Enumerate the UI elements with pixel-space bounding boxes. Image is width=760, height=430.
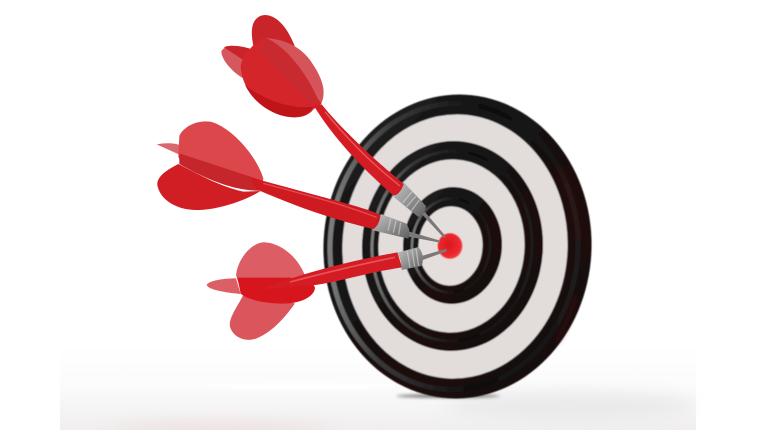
needle <box>422 249 447 260</box>
barrel <box>393 183 426 217</box>
target board <box>316 88 599 405</box>
dart 1: top <box>221 15 446 238</box>
floor shadow <box>60 345 696 430</box>
dart 3: bottom <box>207 242 447 340</box>
centre white disc <box>416 204 485 288</box>
needle <box>408 231 440 243</box>
barrel <box>397 247 423 270</box>
middle black ring <box>357 136 548 356</box>
lower flight <box>230 295 295 340</box>
rear small flight <box>207 278 241 294</box>
rear top flight <box>252 15 295 48</box>
front flight <box>237 278 315 304</box>
rim bevel <box>323 97 585 396</box>
red bullseye <box>438 233 462 259</box>
central vane <box>179 153 263 190</box>
darts, drawn in 3x zoom coordinates <box>157 15 447 340</box>
lower flight <box>157 164 261 210</box>
needle <box>422 212 446 238</box>
rear left flight <box>221 46 253 79</box>
upper flight <box>178 121 263 191</box>
rear small flight <box>157 143 180 155</box>
outer white ring <box>335 108 575 385</box>
shaft <box>250 177 381 229</box>
front flight <box>241 37 322 117</box>
inner black ring <box>400 184 505 307</box>
upper flight <box>236 242 307 293</box>
right translucent flight <box>265 38 324 106</box>
dart 2: middle <box>157 121 440 243</box>
inner white ring <box>374 155 529 337</box>
dark red reflections on rim <box>556 165 580 342</box>
barrel <box>372 214 410 239</box>
shaft <box>260 252 402 289</box>
outer black rim <box>316 88 599 405</box>
shaft <box>313 104 404 196</box>
